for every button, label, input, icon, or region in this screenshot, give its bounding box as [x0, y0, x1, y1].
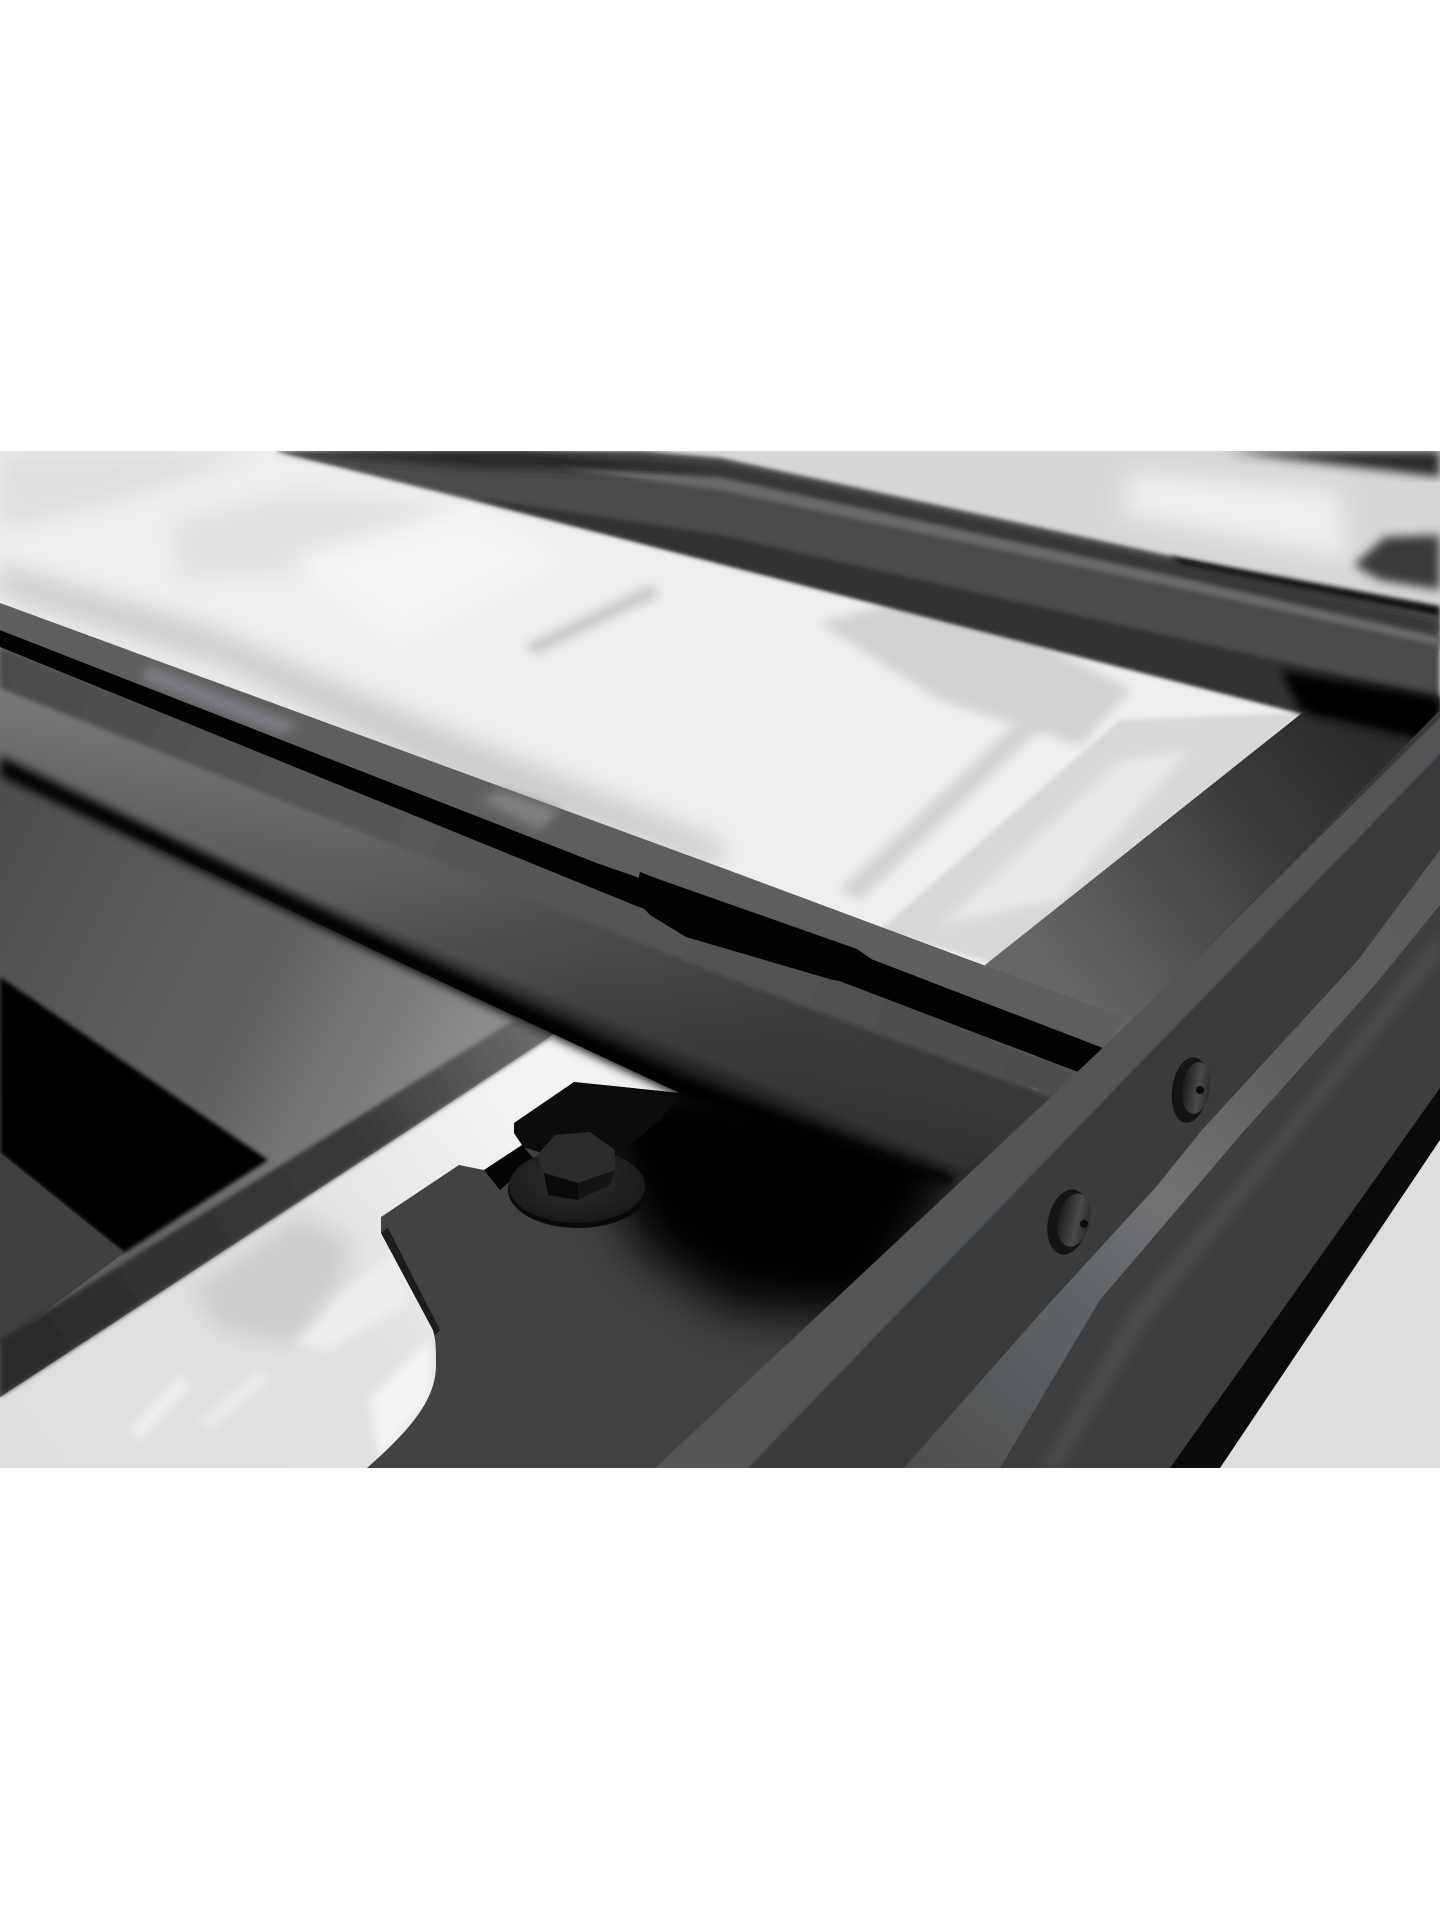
side band	[1056, 1067, 1302, 1374]
textured highlight band	[904, 850, 1440, 1468]
white car roof, lower left	[0, 1037, 720, 1468]
rivet 1	[1172, 1057, 1210, 1123]
dark outer face	[747, 753, 1440, 1468]
dark panel behind the glass, right	[985, 713, 1440, 1100]
dark edge above far glass	[1170, 556, 1440, 618]
photo frame	[0, 451, 1440, 1468]
black shadow at the right end	[1280, 670, 1440, 745]
white car body, lower right	[1220, 1140, 1440, 1468]
cross rail underlay	[828, 710, 1440, 1468]
upper crossbar	[275, 451, 1440, 745]
rivet 2	[1047, 1190, 1090, 1254]
upper strip below slit	[0, 647, 1078, 1098]
black reflection in window	[0, 977, 268, 1253]
lower grey section of window	[0, 1153, 124, 1345]
thin blue edge line	[747, 753, 1440, 1468]
main rail	[0, 603, 1126, 1185]
hex bolt head	[537, 1132, 615, 1172]
dark top stripe of crossbar	[275, 451, 1440, 632]
light edge strip	[655, 718, 1440, 1468]
elongated slot in rail	[634, 872, 880, 985]
glass lip	[0, 603, 1126, 1048]
rail bottom shadow	[0, 756, 950, 1185]
lit stripe of crossbar	[560, 468, 1440, 646]
black underside	[1170, 1088, 1440, 1468]
cross rail with rivets	[655, 710, 1440, 1468]
lower left dark window panel	[0, 760, 560, 1400]
far glass strip, top right	[0, 451, 1440, 651]
mounting bracket plate	[367, 1070, 1060, 1468]
bolt with washer	[508, 1132, 648, 1228]
main glass reflection area	[0, 451, 1302, 965]
shadowed underside of crossbar	[474, 498, 1440, 716]
photo: black roof rack rail and mounting bracket close-up	[0, 451, 1440, 1468]
black slit	[0, 630, 1103, 1072]
diagonal window frame strut	[0, 1020, 551, 1397]
rail face	[0, 647, 1051, 1183]
